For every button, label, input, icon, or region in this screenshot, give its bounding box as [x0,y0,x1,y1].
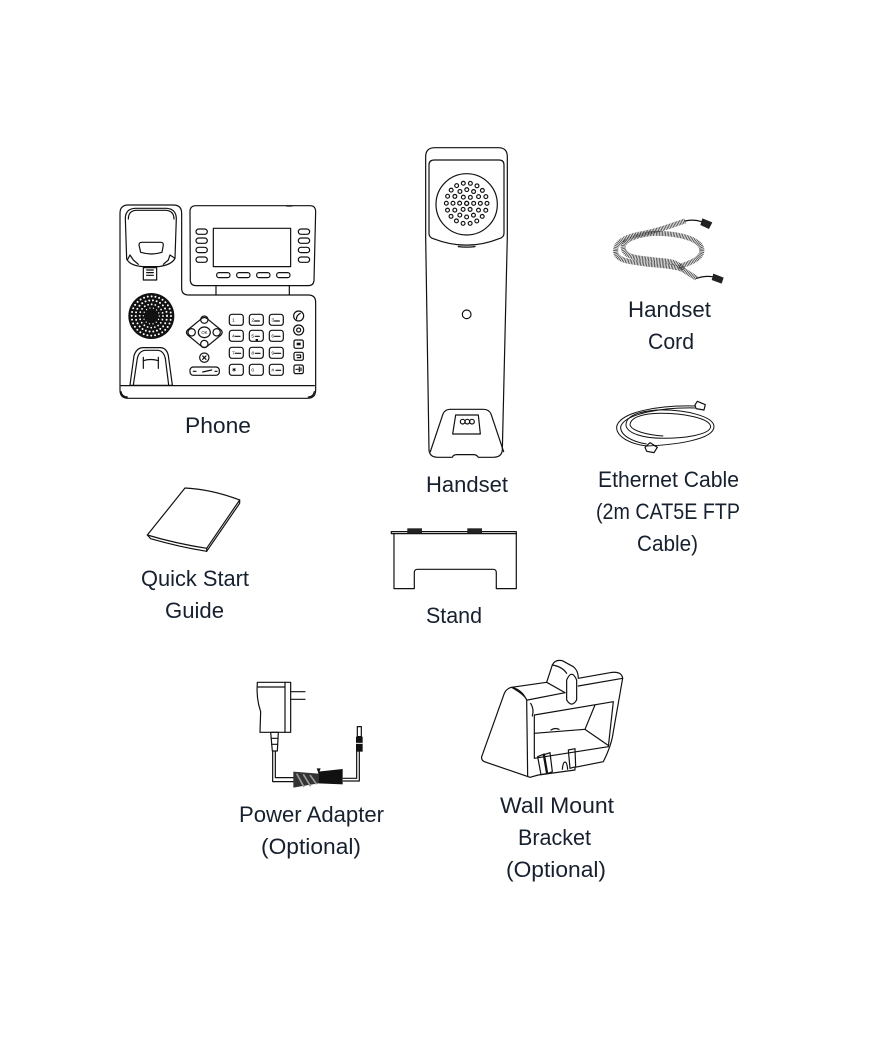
label: Ethernet Cable: Cable) [637,531,698,556]
icon: desk phone [120,205,316,398]
label: Ethernet Cable: (2m CAT5E FTP [596,499,740,524]
label: Power Adapter (Optional): (Optional) [261,834,361,859]
icon: booklet [147,488,240,551]
keypad [229,314,283,375]
label: Phone: Phone [185,413,251,438]
keypad: ✱ [232,368,236,374]
icon: ethernet cable [617,401,714,453]
keypad: 6 [271,334,274,340]
panel: handset [426,148,508,497]
keypad: 7 [232,351,235,357]
keypad: 3 [271,318,274,324]
keypad: 4 [232,334,235,340]
keypad: 9 [271,351,274,357]
icon: coiled cord [616,218,724,284]
icon: navigation keys: OK [201,330,208,335]
icon: handset [426,148,507,457]
panel: phone [120,205,316,438]
label: Wall Mount Bracket (Optional): (Optional) [506,857,606,882]
icon: speaker grille [128,293,174,339]
panel: wall mount bracket [482,660,623,882]
label: Wall Mount Bracket (Optional): Bracket [518,825,591,850]
icon: earpiece holes [446,183,487,224]
label: Stand: Stand [426,603,482,628]
icon: power adapter [257,682,363,788]
label: Handset Cord: Cord [648,329,694,354]
function keys [294,311,304,374]
panel: stand [391,528,516,628]
icon: navigation keys [186,316,222,375]
icon: handset cradle [125,208,176,280]
keypad: 2 [251,318,254,324]
label: Quick Start Guide: Guide [165,598,224,623]
label: Handset: Handset [426,472,508,497]
panel: handset cord [616,218,724,354]
icon: stand [391,528,516,589]
panel: power adapter [239,682,384,859]
label: Wall Mount Bracket (Optional): Wall Mount [500,793,614,818]
label: Quick Start Guide: Quick Start [141,566,249,591]
panel: ethernet cable [596,401,740,556]
panel: quick start guide [141,488,249,623]
keypad: 1 [232,318,235,324]
keypad: 0 [251,368,254,374]
keypad: # [271,368,274,374]
keypad: 5 [251,334,254,340]
icon: wall mount bracket [482,660,623,777]
label: Handset Cord: Handset [628,297,711,322]
label: Ethernet Cable: Ethernet Cable [598,467,739,492]
keypad: 8 [251,351,254,357]
label: Power Adapter (Optional): Power Adapter [239,802,384,827]
icon: lower hook [130,348,173,385]
